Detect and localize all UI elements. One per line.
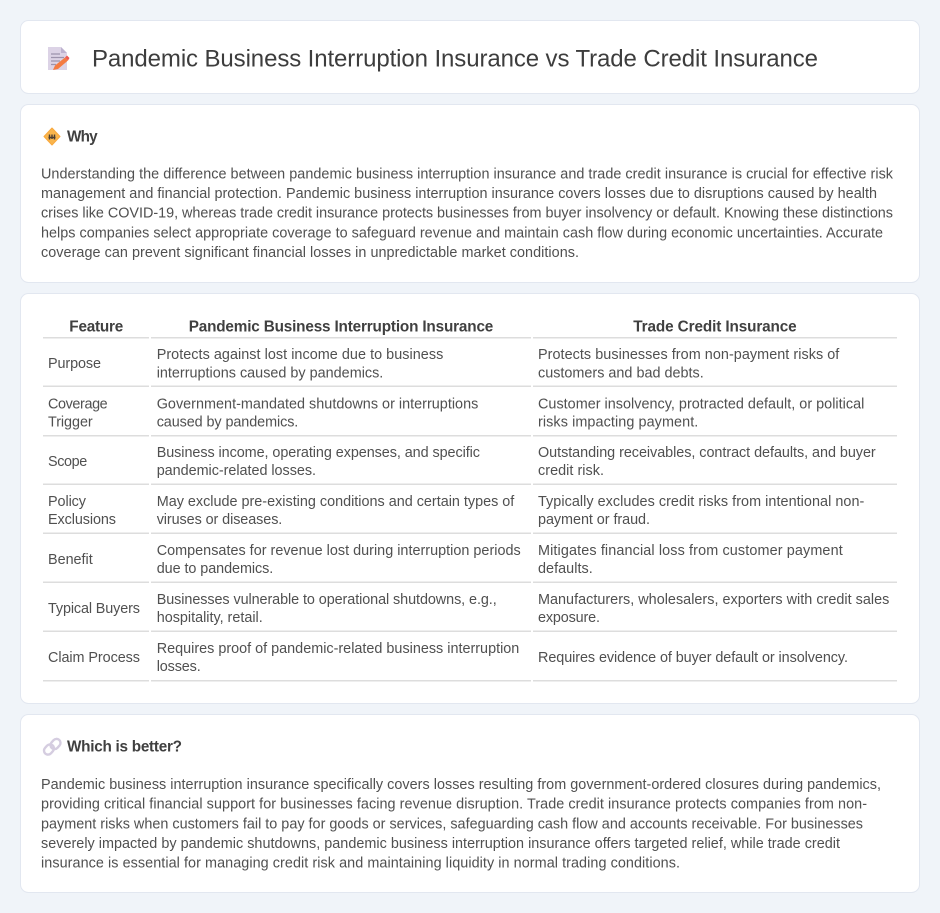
icon: chain link	[42, 737, 62, 756]
heading: why: Why	[67, 129, 98, 146]
row: policy exclusions: May exclude pre-existing conditions and certain types of	[157, 494, 515, 510]
row: purpose: interruptions caused by pandemics.	[157, 366, 383, 382]
panel: which is better	[20, 714, 920, 892]
icon: diamond sign	[44, 128, 60, 145]
panel: why	[20, 104, 920, 282]
row: coverage trigger	[48, 396, 864, 431]
title: Pandemic Business Interruption Insurance vs Trade Credit Insurance	[92, 46, 818, 72]
row: policy exclusions: Policy	[48, 494, 87, 510]
row: typical buyers: hospitality, retail.	[157, 610, 263, 626]
row: claim process: Requires proof of pandemic-related business interruption	[157, 641, 519, 657]
row: scope: credit risk.	[538, 463, 604, 479]
text block: why explanation: Understanding the difference between pandemic business interruption insurance and trade credit insurance is crucial for effective risk	[41, 166, 894, 182]
row: claim process: losses.	[157, 659, 201, 675]
row: scope: Scope	[48, 454, 87, 470]
row: scope: Outstanding receivables, contract defaults, and buyer	[538, 445, 876, 461]
panel: comparison table	[20, 294, 920, 704]
row: typical buyers: exposure.	[538, 610, 600, 626]
row: purpose: Protects against lost income due to business	[157, 347, 443, 363]
row: coverage trigger: Customer insolvency, protracted default, or political	[538, 396, 864, 412]
row: coverage trigger: Government-mandated shutdowns or interruptions	[157, 396, 478, 412]
row: claim process	[48, 641, 848, 675]
table header row: Trade Credit Insurance	[633, 319, 797, 336]
icon: memo with pencil	[48, 47, 70, 70]
row: benefit: due to pandemics.	[157, 561, 273, 577]
row: scope: pandemic-related losses.	[157, 463, 316, 479]
text block: why explanation	[41, 166, 894, 261]
row: coverage trigger: Trigger	[48, 415, 93, 431]
table header row: Feature	[69, 319, 123, 336]
row: coverage trigger: Coverage	[48, 396, 108, 412]
row: purpose: customers and bad debts.	[538, 366, 704, 382]
row: claim process: Claim Process	[48, 650, 140, 666]
row: benefit: defaults.	[538, 561, 593, 577]
row: typical buyers: Manufacturers, wholesalers, exporters with credit sales	[538, 592, 889, 608]
heading: which is better: Which is better?	[67, 739, 182, 756]
row: scope	[48, 445, 876, 479]
row: purpose: Protects businesses from non-payment risks of	[538, 347, 840, 363]
row: typical buyers: Typical Buyers	[48, 601, 140, 617]
text block: why explanation: management and financial protection. Pandemic business interruption insurance covers losses due to disruptions caused by health	[41, 186, 877, 202]
row: policy exclusions: Typically excludes credit risks from intentional non-	[538, 494, 865, 510]
row: benefit: Compensates for revenue lost during interruption periods	[157, 543, 521, 559]
text block: why explanation: helps companies select appropriate coverage to safeguard revenue and maintain cash flow during economic uncertainties. Accurate	[41, 225, 883, 241]
text block: verdict	[41, 777, 881, 872]
row: typical buyers: Businesses vulnerable to operational shutdowns, e.g.,	[157, 592, 497, 608]
row: purpose: Purpose	[48, 356, 101, 372]
row: scope: Business income, operating expenses, and specific	[157, 445, 480, 461]
row: benefit: Mitigates financial loss from customer payment	[538, 543, 843, 559]
text block: verdict: insurance is essential for managing credit risk and maintaining liquidity in normal trading conditions.	[41, 856, 680, 872]
text block: verdict: Pandemic business interruption insurance specifically covers losses resulting from government-ordered closures during pandemics,	[41, 777, 881, 793]
table header row: Pandemic Business Interruption Insurance	[189, 319, 493, 336]
row: policy exclusions: viruses or diseases.	[157, 512, 282, 528]
row: purpose	[48, 347, 840, 382]
text block: why explanation: crises like COVID-19, whereas trade credit insurance protects businesses from buyer insolvency or default. Knowing these distinctions	[41, 206, 893, 222]
row: typical buyers	[48, 592, 889, 626]
row: policy exclusions: Exclusions	[48, 512, 116, 528]
row: coverage trigger: risks impacting payment.	[538, 415, 698, 431]
row: coverage trigger: caused by pandemics.	[157, 415, 298, 431]
row: claim process: Requires evidence of buyer default or insolvency.	[538, 650, 848, 666]
row: policy exclusions: payment or fraud.	[538, 512, 650, 528]
text block: why explanation: coverage can prevent significant financial losses in unpredictable market conditions.	[41, 245, 579, 261]
text block: verdict: payment risks when customers fail to pay for goods or services, safeguarding cash flow and accounts receivable. For businesses	[41, 816, 863, 832]
row: benefit	[48, 543, 843, 577]
row: benefit: Benefit	[48, 552, 93, 568]
text block: verdict: severely impacted by pandemic shutdowns, pandemic business interruption insurance offers targeted relief, while trade credit	[41, 836, 840, 852]
table header row	[69, 319, 797, 336]
text block: verdict: providing critical financial support for businesses facing revenue disruption. Trade credit insurance protects companies from non-	[41, 797, 867, 813]
row: policy exclusions	[48, 494, 865, 528]
panel: title header	[20, 20, 920, 94]
